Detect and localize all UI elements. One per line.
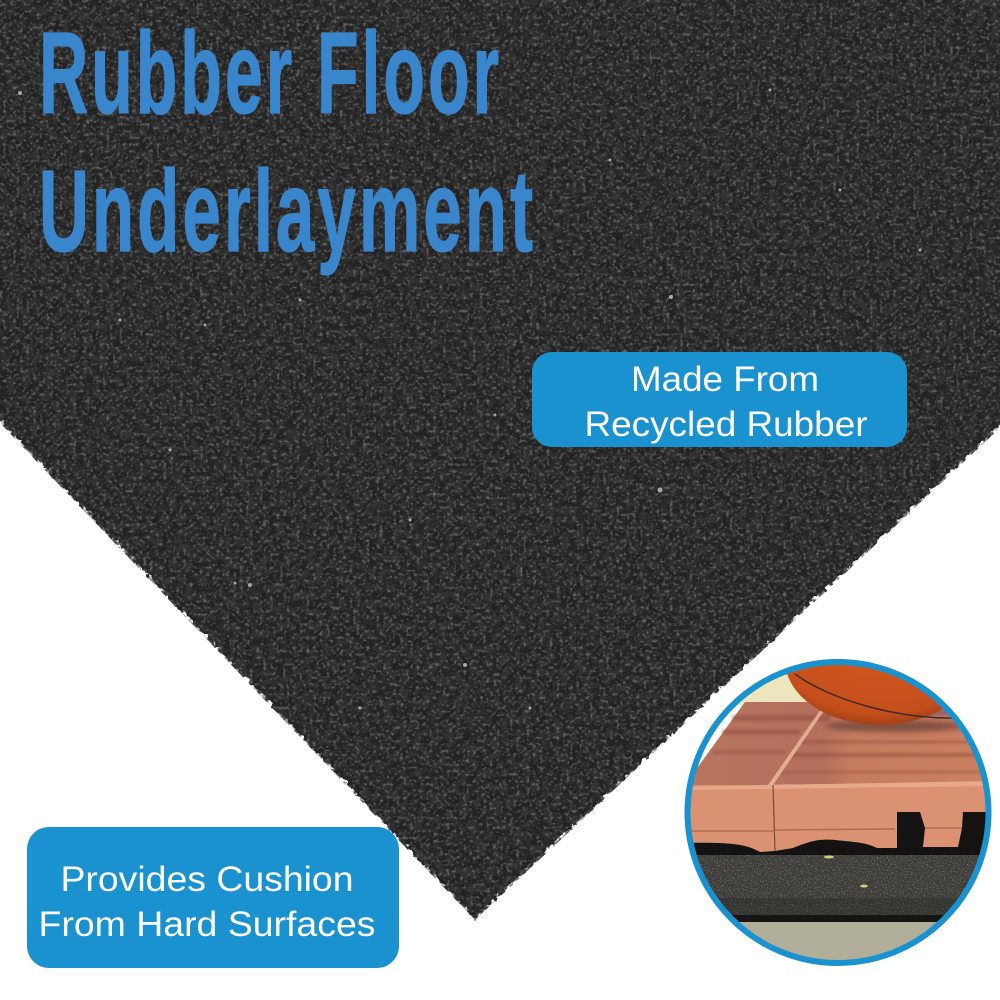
callout: cushion: Provides Cushion <box>60 860 354 899</box>
locking tab <box>925 827 962 829</box>
title line: Rubber Floor: Rubber Floor <box>39 8 502 138</box>
callout: recycled rubber: Made From <box>631 360 819 399</box>
ball shadow <box>825 720 965 732</box>
callout: recycled rubber: Recycled Rubber <box>584 405 868 444</box>
underlayment side <box>718 898 958 915</box>
callout: cushion <box>27 827 399 968</box>
title line: Underlayment: Underlayment <box>39 146 536 276</box>
wall <box>737 674 808 705</box>
callout: cushion: From Hard Surfaces <box>38 905 376 944</box>
black gap under tile <box>694 812 986 855</box>
inset ring <box>688 662 988 963</box>
basketball <box>787 665 943 725</box>
title <box>39 8 536 276</box>
callout: recycled rubber <box>532 352 907 447</box>
tile top <box>684 702 992 786</box>
tile side <box>690 785 986 852</box>
floor <box>740 922 937 960</box>
inset photo: tile on underlayment <box>684 659 992 966</box>
underlayment top <box>696 855 980 898</box>
